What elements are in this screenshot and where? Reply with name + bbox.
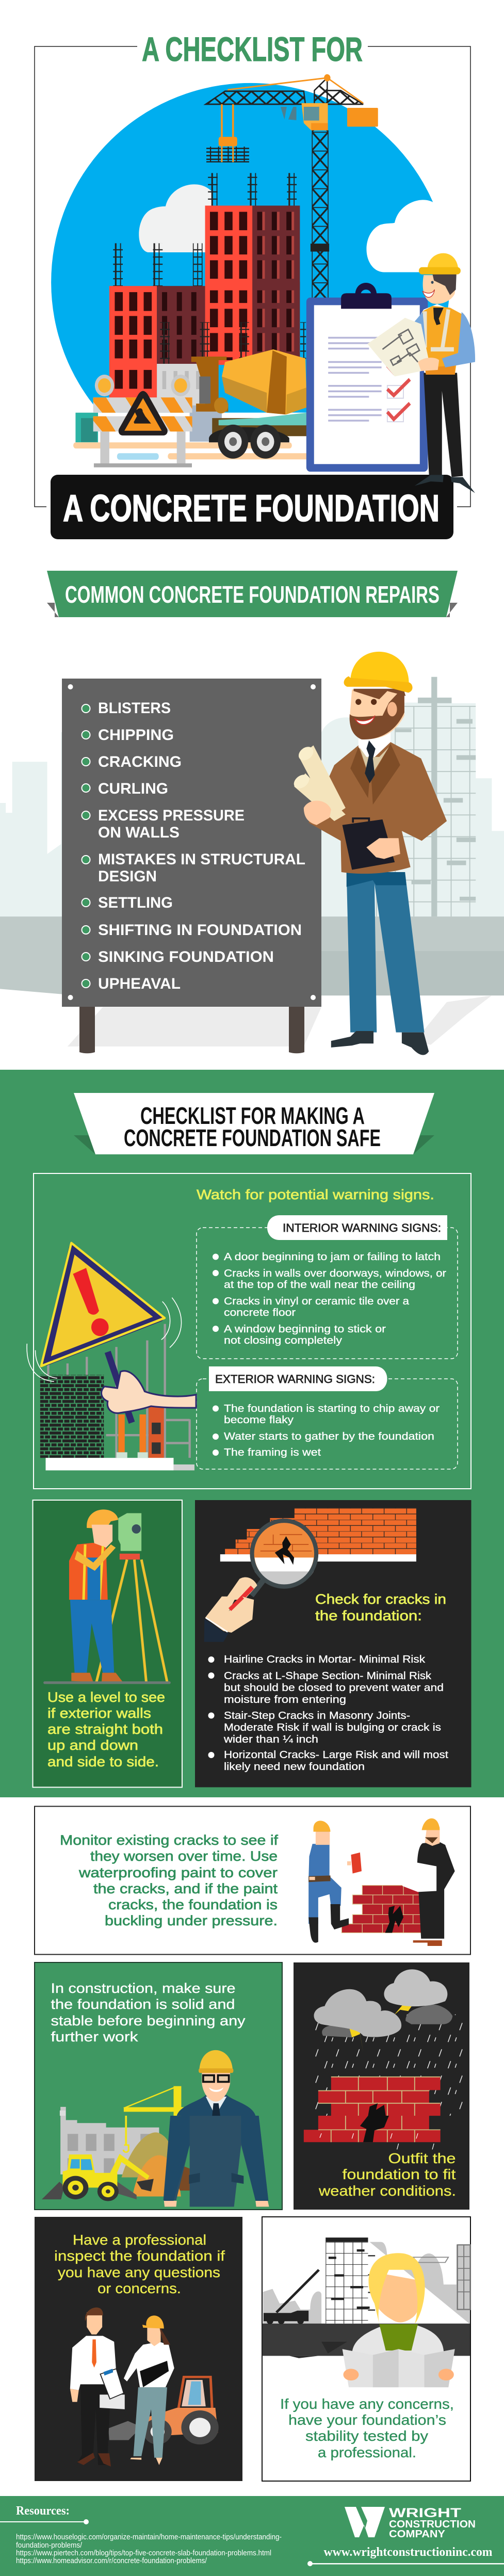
- hat: [199, 2050, 233, 2071]
- clipboard: [343, 819, 395, 870]
- clipboard: [100, 2369, 125, 2409]
- hero illustration: construction site: [51, 74, 460, 472]
- shoes: [415, 475, 475, 493]
- crack list text: Stair-Step Cracks in Masonry Joints-: [224, 1710, 410, 1721]
- banner: checklist for making a concrete foundation safe: CHECKLIST FOR MAKING A: [140, 1102, 365, 1129]
- resources links: https://www.houselogic.com/organize-maintain/home-maintenance-tips/understanding-: [16, 2533, 282, 2541]
- green background lower: [0, 1280, 504, 1797]
- crack list text: Cracks at L-Shape Section- Minimal Risk: [224, 1670, 432, 1682]
- interior warning signs box: A door beginning to jam or failing to latch: [224, 1251, 441, 1263]
- resources links: foundation-problems/: [16, 2541, 83, 2550]
- text: professional inspect: inspect the foundation if: [54, 2248, 225, 2264]
- title: a checklist for: A CHECKLIST FOR: [142, 30, 363, 68]
- gray building: [60, 2107, 159, 2175]
- trousers: [347, 872, 424, 1033]
- crack list text: [223, 1654, 448, 1773]
- suit: [164, 2116, 268, 2207]
- hard hat: [428, 253, 459, 270]
- crack list text: Hairline Cracks in Mortar- Minimal Risk: [224, 1654, 426, 1665]
- boots: [71, 1673, 123, 1682]
- blueprint roll: [140, 2361, 169, 2387]
- text: solid foundation: the foundation is solid and: [51, 1997, 235, 2012]
- text: use a level: [47, 1689, 165, 1769]
- dark clouds: [322, 2024, 352, 2037]
- exterior warning signs box: become flaky: [224, 1414, 294, 1426]
- storm illustration lower: [304, 2116, 441, 2149]
- woman engineer: [343, 2253, 455, 2387]
- gray skyline: [263, 2242, 470, 2324]
- banner: common concrete foundation repairs: [47, 571, 458, 617]
- hand with plans: [304, 801, 331, 825]
- exterior warning signs box: EXTERIOR WARNING SIGNS:: [215, 1373, 375, 1386]
- heading: check for cracks: Check for cracks in: [315, 1591, 446, 1607]
- jacket: [308, 742, 447, 874]
- text: monitor cracks: they worsen over time. Use: [90, 1848, 278, 1864]
- road barrier: [93, 375, 192, 468]
- crack list text: moisture from entering: [224, 1694, 346, 1705]
- text: use a level: if exterior walls: [47, 1705, 151, 1721]
- text: professional inspect: or concerns.: [97, 2280, 181, 2296]
- logo: wright construction company: COMPANY: [389, 2529, 446, 2540]
- interior warning signs box: INTERIOR WARNING SIGNS:: [283, 1221, 441, 1234]
- crack list text: likely need new foundation: [224, 1761, 365, 1773]
- exterior warning signs box: [197, 1366, 458, 1469]
- text: weather conditions: Outfit the: [388, 2150, 456, 2166]
- sky circle: [51, 83, 450, 413]
- mixer truck: [191, 349, 307, 459]
- text: use a level: up and down: [47, 1737, 138, 1753]
- interior warning signs box: A window beginning to stick or: [224, 1324, 386, 1335]
- brick wall: [40, 1375, 104, 1458]
- storm illustration upper: [314, 1969, 463, 2116]
- banner: checklist for making a concrete foundation safe: [74, 1093, 434, 1154]
- sign list text: CHIPPING: [98, 727, 174, 744]
- panel: have a professional inspect: [35, 2217, 242, 2481]
- tripod: [96, 1559, 167, 1682]
- blueprint: [367, 318, 431, 377]
- exterior warning signs box: The framing is wet: [224, 1447, 321, 1458]
- building short: [109, 243, 249, 402]
- footer: [0, 2496, 504, 2576]
- surveyor illustration: [43, 1509, 171, 1684]
- orange column: [117, 1406, 164, 1458]
- exterior warning signs box: Water starts to gather by the foundation: [224, 1431, 434, 1442]
- exterior warning signs box: The foundation is starting to chip away or: [224, 1403, 440, 1414]
- engineer head and crane upper: [60, 2050, 255, 2116]
- section: green checklist background: [0, 1070, 504, 1281]
- heading: check for cracks: the foundation:: [315, 1608, 422, 1623]
- shirt and tie: [359, 731, 391, 762]
- sign list text: ON WALLS: [98, 824, 180, 841]
- rain: [314, 2015, 463, 2116]
- engineer in vest with blueprint: [367, 253, 475, 493]
- logo: wright construction company: WRIGHT: [389, 2506, 461, 2520]
- text: professional inspect: you have any questions: [58, 2264, 220, 2280]
- panel: warning signs: [34, 1173, 471, 1489]
- woman: [124, 2315, 174, 2465]
- heading: check for cracks: [315, 1591, 446, 1623]
- workers and cracked bricks illustration: [308, 1818, 455, 1946]
- text: use a level: and side to side.: [47, 1754, 159, 1769]
- crack list text: Moderate Risk if wall is bulging or crack is: [224, 1722, 441, 1733]
- text: solid foundation: further work: [51, 2029, 138, 2044]
- interior warning signs box: not closing completely: [224, 1335, 342, 1346]
- city and engineer illustration: [262, 2227, 470, 2387]
- cracked brick wall under magnifier: [204, 1508, 416, 1642]
- panel: monitor existing cracks: [35, 1806, 470, 1955]
- text: solid foundation: [51, 1981, 246, 2044]
- rolled plans: [294, 745, 346, 821]
- suit shoulders: [177, 2095, 255, 2116]
- sign list text: CURLING: [98, 780, 168, 797]
- face: [92, 1525, 112, 1548]
- sign list text: CRACKING: [98, 753, 182, 770]
- exclamation mark: [73, 1268, 99, 1315]
- lightning: [349, 2001, 414, 2052]
- bricks top: [318, 2077, 441, 2116]
- motion lines: [27, 1298, 182, 1381]
- man: [70, 2308, 117, 2467]
- text: stability tested: have your foundation’s: [288, 2412, 446, 2428]
- website rule: [307, 2561, 504, 2566]
- text: monitor cracks: cracks, the foundation is: [108, 1897, 278, 1912]
- clouds: [314, 1989, 401, 2037]
- panel: foundation stability test: [262, 2217, 470, 2481]
- logo: wright construction company: [345, 2506, 476, 2540]
- panel: check for cracks: [195, 1500, 472, 1788]
- worker right: [417, 1842, 455, 1939]
- text: solid foundation: stable before beginning any: [51, 2013, 246, 2028]
- loader: [108, 2377, 219, 2444]
- hands: [418, 358, 439, 371]
- sign list text: EXCESS PRESSURE: [98, 807, 245, 824]
- inspectors and loader illustration: [70, 2308, 219, 2467]
- sign list text: DESIGN: [98, 868, 157, 885]
- sign list text: SHIFTING IN FOUNDATION: [98, 922, 302, 939]
- torso: [422, 306, 464, 375]
- text: stability tested: [280, 2396, 454, 2460]
- hand: [102, 1371, 196, 1413]
- ground strips: [73, 442, 309, 460]
- interior warning signs box: Cracks in vinyl or ceramic tile over a: [224, 1296, 410, 1307]
- hand on clipboard: [366, 838, 400, 859]
- legs: [70, 1600, 114, 1673]
- sign rivets: [68, 684, 316, 1000]
- icon: warning sign held over wall: [27, 1243, 196, 1470]
- head: [423, 275, 457, 304]
- blueprint sheet: [402, 1860, 436, 1892]
- slab: [45, 1458, 194, 1470]
- section 2: construction background: [0, 677, 504, 1046]
- digger: [42, 2154, 154, 2201]
- sign list text: BLISTERS: [98, 700, 171, 717]
- text: monitor cracks: waterproofing paint to cover: [78, 1865, 278, 1880]
- white ground mask: [64, 413, 308, 471]
- total station: [118, 1513, 141, 1551]
- text: stability tested: If you have any concerns,: [280, 2396, 454, 2412]
- interior warning signs box: concrete floor: [224, 1307, 296, 1318]
- banner: checklist for making a concrete foundation safe: CONCRETE FOUNDATION SAFE: [124, 1124, 381, 1151]
- black building: [326, 2227, 470, 2324]
- resources rule: [0, 2519, 89, 2524]
- sign posts: [79, 1006, 304, 1053]
- skyline: [0, 717, 504, 918]
- arms: [414, 312, 475, 367]
- resources links: https://www.homeadvisor.com/r/concrete-foundation-problems/: [16, 2557, 207, 2565]
- text: stability tested: stability tested by: [305, 2428, 428, 2444]
- text: monitor cracks: buckling under pressure.: [105, 1913, 278, 1928]
- text: weather conditions: foundation to fit: [343, 2166, 456, 2182]
- shadows: [68, 1007, 321, 1046]
- heading: resources: Resources:: [16, 2504, 70, 2518]
- text: solid foundation: In construction, make sure: [51, 1981, 235, 1996]
- text: monitor cracks: [60, 1832, 279, 1928]
- bearded engineer with plans: [291, 652, 447, 1055]
- text: use a level: Use a level to see: [47, 1689, 165, 1705]
- text: stability tested: a professional.: [318, 2444, 416, 2460]
- panel: weather conditions: [294, 1962, 469, 2210]
- interior warning signs box: [197, 1215, 458, 1359]
- face: [202, 2070, 230, 2102]
- text: professional inspect: Have a professional: [73, 2232, 206, 2248]
- worker left: [308, 1832, 342, 1924]
- triangle: [46, 1248, 160, 1362]
- panel: use a level: [33, 1500, 182, 1788]
- vest: [69, 1543, 108, 1600]
- scaffolding: [48, 1324, 190, 1458]
- crack bullets: [208, 1656, 215, 1758]
- resources links: https://www.piertech.com/blog/tips/top-five-concrete-slab-foundation-problems.html: [16, 2549, 271, 2557]
- sign stick: [108, 1352, 132, 1423]
- ground: [43, 1681, 171, 1684]
- shoes: [331, 1031, 429, 1055]
- sign bullets: [82, 704, 90, 988]
- sign list text: [98, 700, 305, 992]
- panel: repairs sign board: [62, 679, 321, 1053]
- crack: [385, 1906, 403, 1933]
- crack list text: wider than ¼ inch: [223, 1734, 318, 1745]
- cloud right: [366, 200, 460, 272]
- resources links: [16, 2533, 282, 2565]
- sign list text: UPHEAVAL: [98, 975, 181, 992]
- crane hook: [124, 2116, 127, 2145]
- crack list text: but should be closed to prevent water and: [224, 1682, 444, 1694]
- clipboard with checklist: [306, 283, 428, 472]
- hard hat: [350, 652, 409, 684]
- website: www.wrightconstructioninc.com: [324, 2546, 493, 2559]
- heading: watch for warning signs: Watch for potential warning signs.: [197, 1187, 434, 1202]
- interior warning signs box: at the top of the wall near the ceiling: [224, 1279, 415, 1291]
- crane: [206, 74, 378, 300]
- text: use a level: are straight both: [47, 1721, 163, 1737]
- hat: [87, 1509, 118, 1528]
- trousers: [424, 373, 463, 477]
- held brick: [351, 1853, 362, 1874]
- crane: [124, 2087, 193, 2116]
- sign list text: MISTAKES IN STRUCTURAL: [98, 851, 305, 868]
- tower crane: [413, 2257, 448, 2262]
- concrete wall: [75, 364, 222, 442]
- sign list text: SETTLING: [98, 894, 173, 911]
- text: monitor cracks: the cracks, and if the paint: [93, 1881, 278, 1896]
- arm: [75, 1544, 116, 1571]
- crack list text: Horizontal Cracks- Large Risk and will most: [224, 1749, 448, 1761]
- sign list text: SINKING FOUNDATION: [98, 948, 274, 965]
- building and digger illustration lower: [42, 2107, 269, 2207]
- text: monitor cracks: Monitor existing cracks to see if: [60, 1832, 279, 1848]
- ground: [0, 916, 504, 995]
- text: weather conditions: weather conditions.: [318, 2183, 456, 2199]
- cloud left: [139, 184, 212, 252]
- interior warning signs box: Cracks in walls over doorways, windows, or: [224, 1268, 446, 1279]
- text: professional inspect: [54, 2232, 225, 2296]
- sand mounds: [122, 2132, 175, 2177]
- logo: wright construction company: CONSTRUCTION: [389, 2519, 476, 2530]
- building tall: [205, 173, 306, 365]
- title bar: [51, 475, 453, 539]
- text: weather conditions: [318, 2150, 456, 2199]
- bricks: [342, 1886, 444, 1933]
- crack: [368, 2103, 386, 2116]
- head: [350, 689, 404, 739]
- hero frame: [35, 46, 470, 507]
- mobile crane: [264, 2270, 319, 2324]
- panel: solid foundation: [35, 1962, 282, 2210]
- building under construction: [376, 677, 476, 916]
